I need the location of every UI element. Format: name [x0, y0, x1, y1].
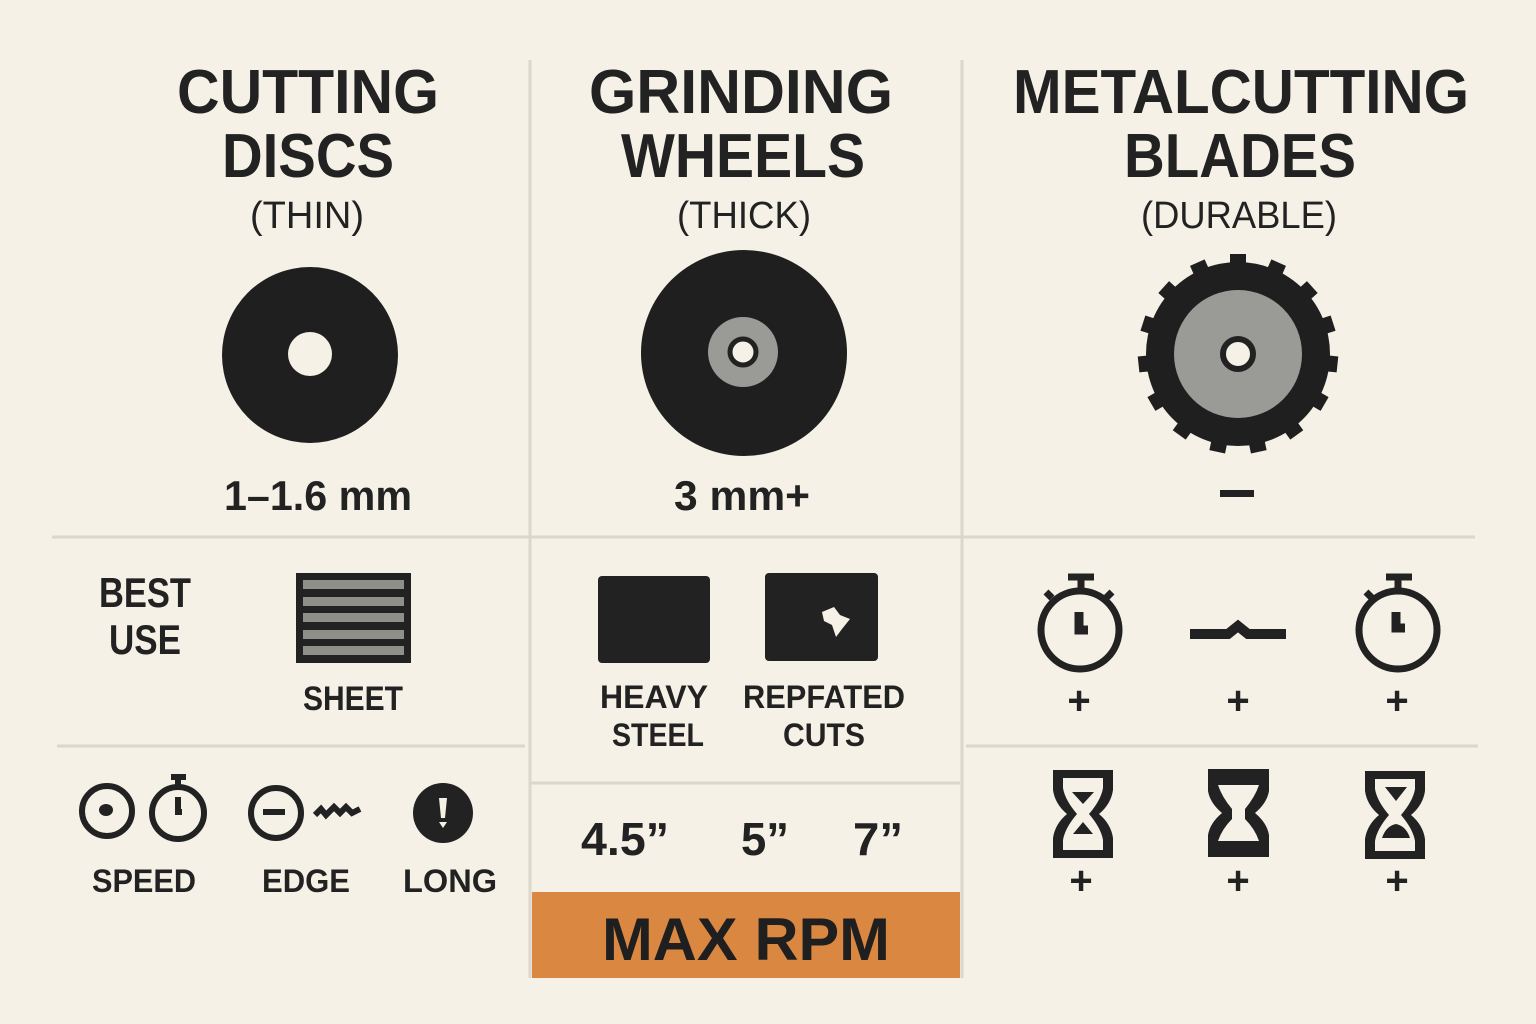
title: grinding wheels: [589, 58, 893, 237]
icon: sheet: [296, 573, 411, 663]
plus signs row 2: [1069, 859, 1409, 903]
use labels: [600, 679, 905, 753]
icon: thin disc: [222, 267, 398, 443]
plus signs row 2: +: [1226, 859, 1250, 903]
plus signs row 1: [1067, 679, 1409, 723]
plus signs row 2: +: [1385, 859, 1409, 903]
title: metalcutting blades: [1013, 58, 1469, 237]
plus signs row 1: +: [1226, 679, 1250, 723]
use labels: HEAVY: [600, 679, 708, 715]
icon: repeated cuts: [765, 573, 878, 661]
title: grinding wheels: GRINDING: [589, 58, 893, 127]
title: grinding wheels: (THICK): [677, 195, 811, 237]
title: cutting discs: [177, 58, 439, 237]
use labels: STEEL: [612, 717, 704, 753]
icon: toothed blade: [1138, 254, 1338, 453]
feature labels: EDGE: [262, 863, 350, 899]
banner: max rpm: [532, 892, 960, 978]
title: cutting discs: (THIN): [250, 195, 364, 237]
icon: long: [413, 783, 473, 843]
title: grinding wheels: WHEELS: [621, 122, 865, 191]
sizes: [581, 813, 903, 865]
dash label: [1220, 490, 1254, 497]
best use label: BEST: [99, 569, 191, 616]
best use label: USE: [109, 616, 181, 663]
icon: heavy steel: [598, 576, 710, 663]
panel: cutting discs: [82, 58, 497, 899]
feature labels: SPEED: [92, 863, 196, 899]
title: metalcutting blades: (DURABLE): [1141, 195, 1337, 237]
thickness label: 1–1.6 mm: [224, 472, 412, 519]
sizes: 4.5”: [581, 813, 669, 865]
plus signs row 1: +: [1067, 679, 1091, 723]
sheet label: SHEET: [303, 680, 403, 718]
icon row: stopwatches: [1041, 577, 1437, 669]
title: metalcutting blades: BLADES: [1124, 122, 1356, 191]
panel: metalcutting blades: [1013, 58, 1469, 903]
use labels: CUTS: [783, 717, 865, 753]
sizes: 5”: [741, 813, 789, 865]
best use label: [99, 569, 191, 663]
icon: thick wheel: [641, 250, 847, 456]
icon: speed: [82, 777, 204, 839]
title: cutting discs: CUTTING: [177, 58, 439, 127]
plus signs row 1: +: [1385, 679, 1409, 723]
panel: grinding wheels: [532, 58, 960, 978]
title: cutting discs: DISCS: [222, 122, 394, 191]
sizes: 7”: [853, 813, 903, 865]
title: metalcutting blades: METALCUTTING: [1013, 58, 1469, 127]
icon row: hourglasses: [1053, 769, 1425, 859]
thickness label: 3 mm+: [674, 472, 810, 519]
banner: max rpm: MAX RPM: [602, 906, 890, 973]
feature labels: LONG: [403, 863, 497, 899]
use labels: REPFATED: [743, 679, 905, 715]
feature labels: [92, 863, 497, 899]
icon: edge: [251, 788, 360, 838]
plus signs row 2: +: [1069, 859, 1093, 903]
